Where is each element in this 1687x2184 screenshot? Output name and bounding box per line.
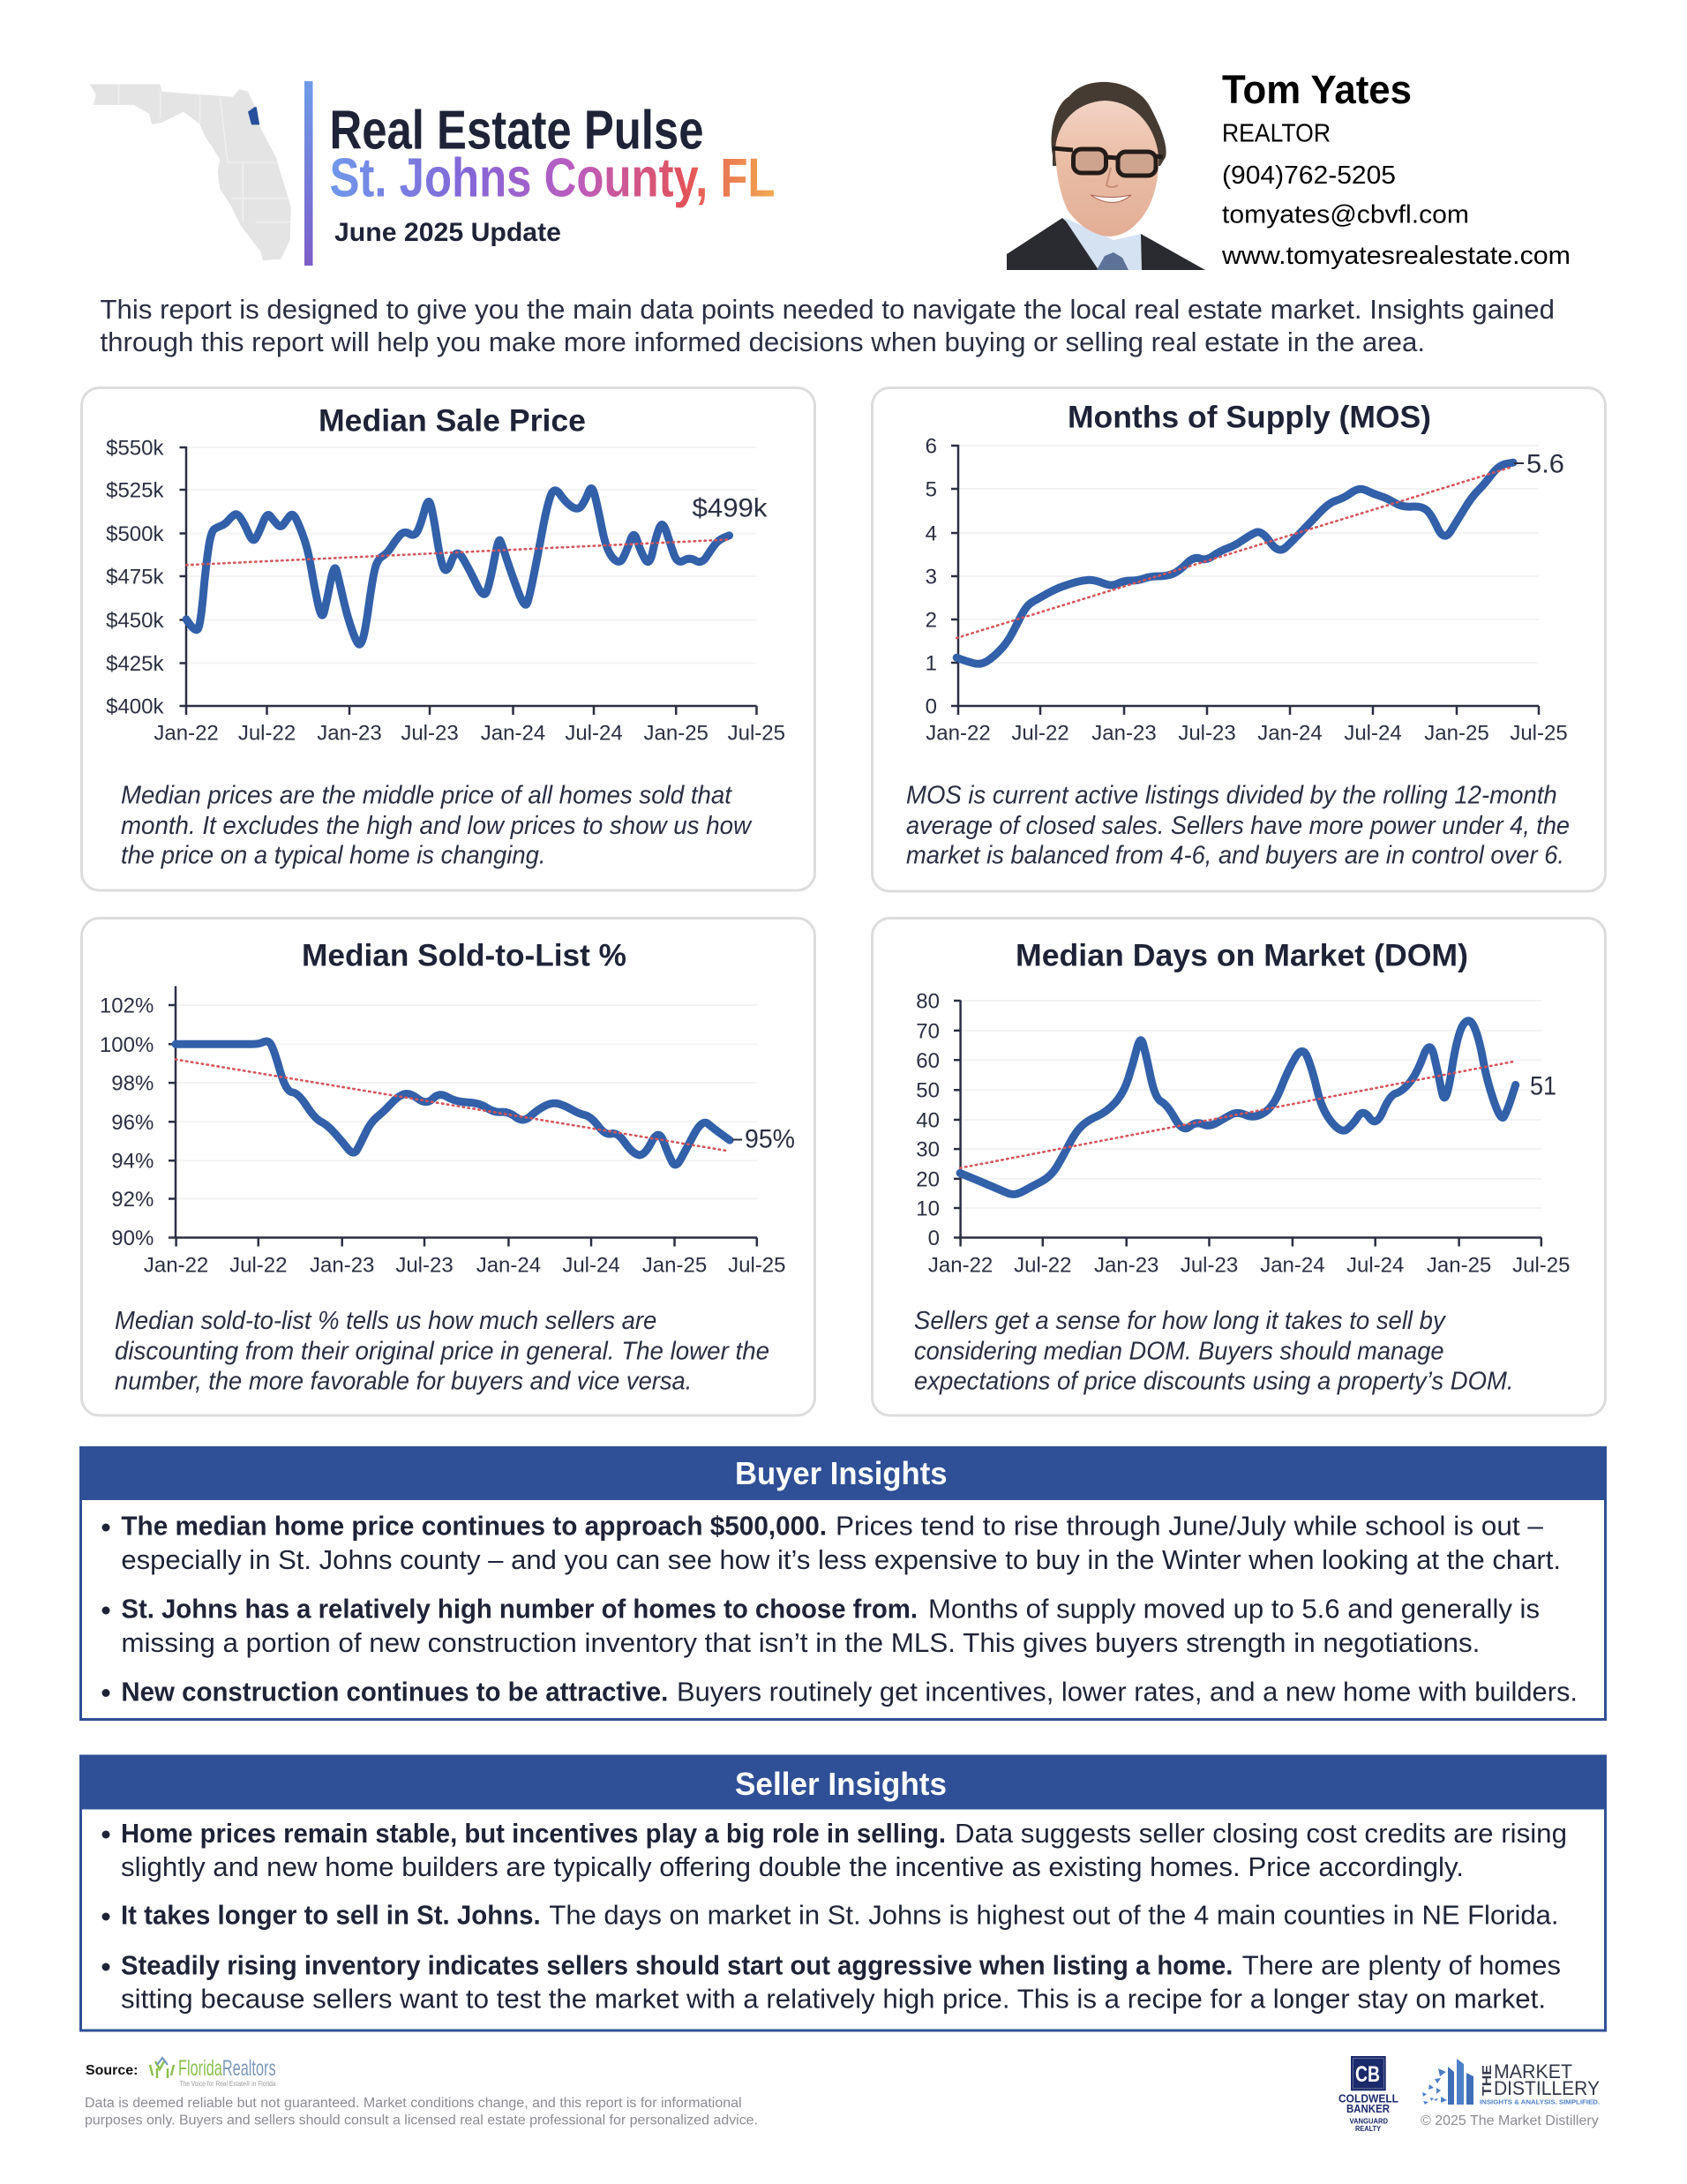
chart: days on market line: 30 xyxy=(916,1138,940,1162)
insight: longer to sell: It takes longer to sell in St. Johns. xyxy=(121,1900,541,1931)
chart: months of supply line: Jan-24 xyxy=(1257,722,1323,745)
chart: days on market line: 0 xyxy=(928,1227,940,1250)
heading: months of supply: Months of Supply (MOS) xyxy=(1068,401,1431,435)
chart: days on market line: Jan-22 xyxy=(928,1253,993,1278)
caption: sold-to-list: Median sold-to-list % tells us how much sellers are xyxy=(115,1307,656,1335)
chart: days on market line: Jan-25 xyxy=(1427,1253,1491,1278)
intro text xyxy=(101,294,1555,357)
disclaimer xyxy=(85,2096,758,2128)
caption: months of supply: MOS is current active listings divided by the rolling 12-month xyxy=(906,782,1557,810)
logo: The Market Distillery: DISTILLERY xyxy=(1494,2077,1600,2099)
chart: sold-to-list line: 100% xyxy=(100,1033,154,1057)
agent email: tomyates@cbvfl.com xyxy=(1222,201,1469,229)
heading: median days on market: Median Days on Market (DOM) xyxy=(1016,939,1468,973)
insight: prices stable, incentives: slightly and new home builders are typically offering double the incentive as existing homes. Price accordingly. xyxy=(121,1851,1464,1882)
panel: buyer insights xyxy=(79,1446,1607,1719)
chart: sold-to-list line: Jul-22 xyxy=(229,1253,287,1278)
chart: median sale price line: $550k xyxy=(106,436,164,461)
logo: The Market Distillery: THE xyxy=(1480,2065,1495,2096)
logo: Florida Realtors: FloridaRealtors xyxy=(178,2056,276,2081)
insight: homes to choose from: missing a portion of new construction inventory that isn’t in the MLS. This gives buyers strength in negotiations. xyxy=(121,1627,1480,1658)
chart: sold-to-list line: Jan-24 xyxy=(476,1253,541,1278)
insight: new construction: Buyers routinely get incentives, lower rates, and a new home with builders. xyxy=(677,1677,1578,1707)
heading: median sale price: Median Sale Price xyxy=(319,404,586,438)
caption: sold-to-list xyxy=(115,1307,769,1396)
panel: median sold-to-list xyxy=(81,918,815,1415)
chart: months of supply line: 6 xyxy=(926,434,937,459)
icon: Florida map with St. Johns County highlighted xyxy=(89,84,291,260)
chart: days on market line: Jul-23 xyxy=(1181,1253,1238,1278)
insight: rising inventory: Steadily rising inventory indicates sellers should start out aggressive when listing a home. xyxy=(121,1950,1233,1981)
chart: days on market line xyxy=(916,990,1570,1278)
heading: median sold-to-list: Median Sold-to-List % xyxy=(302,939,626,973)
logo: The Market Distillery xyxy=(1422,2059,1600,2105)
chart: months of supply line: Jul-22 xyxy=(1011,722,1069,745)
panel: seller insights xyxy=(79,1754,1607,2030)
title: Real Estate Pulse: Real Estate Pulse xyxy=(330,101,704,161)
caption: median sale price xyxy=(121,782,753,870)
chart: days on market line: Jan-24 xyxy=(1260,1253,1325,1278)
caption: months of supply xyxy=(906,782,1570,870)
caption: median sale price: the price on a typical home is changing. xyxy=(121,842,545,870)
chart: months of supply line: Jul-23 xyxy=(1178,722,1236,745)
insight: new construction: New construction continues to be attractive. xyxy=(121,1677,668,1707)
chart: median sale price line: Jul-25 xyxy=(728,722,785,745)
logo: Coldwell Banker Vanguard Realty xyxy=(1338,2056,1398,2133)
caption: sold-to-list: number, the more favorable for buyers and vice versa. xyxy=(115,1368,692,1396)
agent title: REALTOR xyxy=(1222,120,1331,148)
chart: days on market line: Jul-22 xyxy=(1014,1253,1071,1278)
value label: 5.6: 5.6 xyxy=(1526,450,1564,478)
insight: rising inventory xyxy=(102,1950,1561,2014)
insight: median price approaching 500k xyxy=(102,1511,1561,1575)
chart: median sale price line: Jul-24 xyxy=(565,722,623,745)
chart: months of supply line: Jan-23 xyxy=(1091,722,1157,745)
agent name: Tom Yates xyxy=(1222,67,1412,112)
caption: days on market xyxy=(914,1307,1514,1396)
insight: longer to sell: The days on market in St. Johns is highest out of the 4 main counties in NE Florida. xyxy=(549,1900,1558,1931)
date line: June 2025 Update xyxy=(334,218,561,247)
chart: days on market line: Jul-25 xyxy=(1512,1253,1570,1278)
chart: days on market line: 60 xyxy=(916,1049,940,1073)
chart: sold-to-list line: Jul-24 xyxy=(562,1253,620,1278)
panel: median days on market xyxy=(872,918,1606,1415)
heading: seller insights: Seller Insights xyxy=(735,1766,947,1802)
subtitle: county name: St. Johns County, FL xyxy=(330,148,775,208)
agent website: www.tomyatesrealestate.com xyxy=(1221,242,1571,270)
chart: sold-to-list line: 98% xyxy=(111,1071,154,1096)
chart: sold-to-list line: Jan-25 xyxy=(642,1253,707,1278)
insight: median price approaching 500k: especially in St. Johns county – and you can see how it’s less expensive to buy in the Winter when looking at the chart. xyxy=(121,1544,1561,1575)
caption: days on market: expectations of price discounts using a property’s DOM. xyxy=(914,1368,1514,1396)
chart: median sale price line: $500k xyxy=(106,522,164,546)
logo: Coldwell Banker Vanguard Realty: BANKER xyxy=(1346,2103,1390,2115)
chart: sold-to-list line: 94% xyxy=(111,1150,154,1174)
chart: sold-to-list line: Jul-25 xyxy=(728,1253,785,1278)
value label: 51: 51 xyxy=(1530,1071,1556,1101)
logo: The Market Distillery: MARKET xyxy=(1494,2060,1572,2083)
chart: sold-to-list line: Jul-23 xyxy=(395,1253,454,1278)
insight: homes to choose from: Months of supply moved up to 5.6 and generally is xyxy=(928,1594,1540,1624)
chart: months of supply line: 2 xyxy=(926,609,937,632)
panel: median sale price xyxy=(81,388,815,890)
caption: sold-to-list: discounting from their original price in general. The lower the xyxy=(115,1338,769,1366)
chart: months of supply line: Jul-24 xyxy=(1344,722,1402,745)
agent portrait xyxy=(1007,82,1205,270)
chart: days on market line: 80 xyxy=(916,990,940,1013)
chart: months of supply line: Jan-25 xyxy=(1424,722,1489,745)
gradient divider bar xyxy=(304,81,312,266)
chart: months of supply line: 3 xyxy=(926,565,937,589)
chart: days on market line: 10 xyxy=(916,1197,940,1221)
insight: prices stable, incentives: Data suggests seller closing cost credits are rising xyxy=(955,1818,1567,1849)
chart: months of supply line: 4 xyxy=(926,522,937,545)
insight: rising inventory: There are plenty of homes xyxy=(1242,1950,1561,1981)
chart: median sale price line: $400k xyxy=(106,695,164,718)
chart: sold-to-list line: 90% xyxy=(111,1227,154,1250)
chart: days on market line: 20 xyxy=(916,1167,940,1191)
caption: median sale price: Median prices are the middle price of all homes sold that xyxy=(121,782,732,810)
chart: median sale price line: Jan-25 xyxy=(644,722,709,745)
source label: Source: xyxy=(86,2063,138,2078)
logo: Coldwell Banker Vanguard Realty: VANGUARD xyxy=(1350,2117,1388,2126)
chart: median sale price line: $425k xyxy=(106,652,164,676)
insight: prices stable, incentives: Home prices remain stable, but incentives play a big role in selling. xyxy=(121,1818,946,1849)
chart: median sale price line: Jan-24 xyxy=(481,722,545,745)
chart: sold-to-list line: 102% xyxy=(100,994,154,1018)
chart: months of supply line xyxy=(926,434,1568,745)
copyright: © 2025 The Market Distillery xyxy=(1421,2113,1599,2128)
logo: Florida Realtors: The Voice for Real Estate® in Florida xyxy=(180,2080,276,2088)
caption: days on market: considering median DOM. Buyers should manage xyxy=(914,1338,1443,1366)
chart: median sale price line: Jul-22 xyxy=(238,722,296,745)
chart: days on market line: 40 xyxy=(916,1108,940,1133)
insight: longer to sell xyxy=(102,1900,1558,1931)
chart: sold-to-list line: Jan-23 xyxy=(310,1253,374,1278)
logo: The Market Distillery: INSIGHTS & ANALYSIS. SIMPLIFIED. xyxy=(1480,2098,1600,2105)
insight: median price approaching 500k: Prices tend to rise through June/July while school is out – xyxy=(836,1511,1544,1541)
intro text: through this report will help you make more informed decisions when buying or selling real estate in the area. xyxy=(101,326,1425,357)
chart: sold-to-list line: 92% xyxy=(111,1188,154,1212)
chart: sold-to-list line: 96% xyxy=(111,1111,154,1135)
chart: days on market line: Jul-24 xyxy=(1346,1253,1404,1278)
disclaimer: purposes only. Buyers and sellers should consult a licensed real estate professional for personalized advice. xyxy=(85,2113,758,2128)
chart: median sale price line: Jan-23 xyxy=(317,722,382,745)
logo: Florida Realtors xyxy=(150,2056,276,2088)
chart: months of supply line: Jan-22 xyxy=(926,722,991,745)
disclaimer: Data is deemed reliable but not guaranteed. Market conditions change, and this report is for informational xyxy=(85,2096,742,2111)
chart: median sale price line: $525k xyxy=(106,478,164,503)
caption: days on market: Sellers get a sense for how long it takes to sell by xyxy=(914,1307,1446,1335)
chart: months of supply line: 0 xyxy=(926,695,937,718)
agent phone: (904)762-5205 xyxy=(1222,161,1396,190)
panel: months of supply xyxy=(872,388,1606,891)
chart: months of supply line: 1 xyxy=(926,651,937,676)
heading: buyer insights: Buyer Insights xyxy=(735,1455,948,1491)
insight: homes to choose from xyxy=(102,1594,1540,1658)
chart: months of supply line: 5 xyxy=(926,478,937,501)
chart: sold-to-list line xyxy=(100,987,795,1278)
chart: months of supply line: Jul-25 xyxy=(1510,722,1568,745)
logo: Coldwell Banker Vanguard Realty: COLDWELL xyxy=(1338,2093,1398,2105)
chart: median sale price line xyxy=(106,436,785,745)
insight: median price approaching 500k: The median home price continues to approach $500,000. xyxy=(121,1511,827,1541)
insight: homes to choose from: St. Johns has a relatively high number of homes to choose from. xyxy=(121,1594,918,1624)
caption: median sale price: month. It excludes the high and low prices to show us how xyxy=(121,812,753,840)
value label: 95%: 95% xyxy=(745,1124,795,1154)
insight: rising inventory: sitting because sellers want to test the market with a relatively high price. This is a recipe for a longer stay on market. xyxy=(121,1984,1546,2014)
insight: new construction xyxy=(102,1677,1578,1707)
caption: months of supply: average of closed sales. Sellers have more power under 4, the xyxy=(906,812,1570,840)
chart: median sale price line: $450k xyxy=(106,609,164,633)
chart: median sale price line: Jan-22 xyxy=(154,722,219,745)
value label: $499k: $499k xyxy=(692,494,769,522)
logo: Coldwell Banker Vanguard Realty: CB xyxy=(1355,2062,1380,2087)
chart: median sale price line: $475k xyxy=(106,565,164,589)
logo: Coldwell Banker Vanguard Realty: REALTY xyxy=(1355,2124,1381,2133)
chart: days on market line: 50 xyxy=(916,1079,940,1103)
chart: days on market line: 70 xyxy=(916,1019,940,1043)
intro text: This report is designed to give you the main data points needed to navigate the local real estate market. Insights gained xyxy=(101,294,1555,325)
chart: median sale price line: Jul-23 xyxy=(401,722,459,745)
chart: sold-to-list line: Jan-22 xyxy=(144,1253,208,1278)
caption: months of supply: market is balanced from 4-6, and buyers are in control over 6. xyxy=(906,842,1564,870)
insight: prices stable, incentives xyxy=(102,1818,1567,1882)
chart: days on market line: Jan-23 xyxy=(1094,1253,1158,1278)
